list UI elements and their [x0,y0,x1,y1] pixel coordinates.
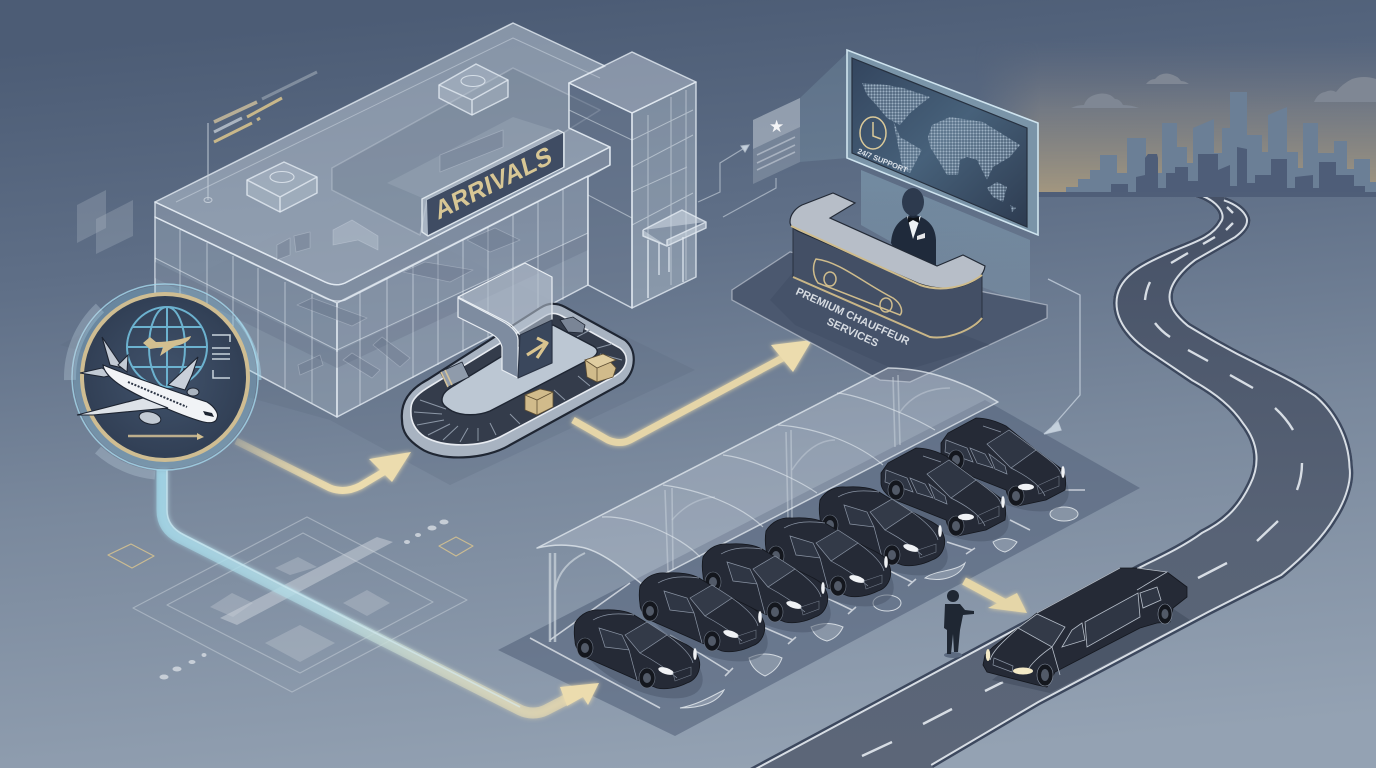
clock [860,117,886,149]
clouds [1071,74,1376,108]
parking bay lines [530,490,1085,708]
rooftop unit right [439,64,508,115]
data brackets [212,335,230,378]
reception desk [790,193,985,350]
canopy band [155,147,610,301]
map continents [862,83,1020,212]
canopy glass roof [537,368,998,585]
large airliner [77,337,218,426]
desk label: PREMIUM CHAUFFEUR [794,286,911,348]
kiosk tunnel [458,263,552,378]
service card with star: ★ [769,117,784,136]
luggage box front [525,389,553,415]
small gold plane [143,336,191,356]
car 2 [630,561,780,679]
flow arrow: plane to carousel [236,441,411,490]
luggage grey rear [560,317,585,333]
roof [155,23,610,285]
luggage box right [585,354,616,382]
holographic projection [800,52,1030,305]
dotted specks [160,520,448,680]
arrivals sign [422,130,564,236]
car logo [814,259,902,315]
service card with star [753,98,800,184]
desk gold trim [793,277,982,337]
skyline with dusk glow [996,66,1376,197]
decorative translucent panels [77,190,133,254]
floor plate: parking lot [498,400,1140,736]
arrival badge [70,284,260,475]
conveyor carousel [402,263,634,457]
entrance porch [643,210,706,298]
inner island [442,325,597,415]
floor plate: terminal [60,200,695,485]
canopy ribs [602,393,935,557]
flow line: plane to fleet [162,470,599,713]
desk front [793,228,982,337]
luggage grey [440,362,469,387]
connector: to service card [698,145,776,217]
flow arrow: carousel to desk [573,340,812,443]
arrivals sign: ARRIVALS [432,141,555,226]
centre dashes [862,207,1302,756]
car 5 [810,475,960,593]
direction arrow [128,435,197,437]
interior dark band [155,233,588,368]
tan markers [108,537,473,568]
belt slats [414,330,622,442]
road [750,197,1353,768]
horizon strip [1038,192,1376,197]
far SUV under canopy [931,411,1081,529]
rooftop unit left [247,162,317,212]
roof inner line [176,38,600,202]
glass canopy [537,368,998,642]
car 3 [693,532,843,650]
parking emblems [680,507,1078,708]
chauffeur figure [944,590,974,658]
city buildings light [1066,92,1376,192]
building right wall [337,176,588,417]
city buildings dark [1111,147,1365,192]
car 6 [871,441,1021,559]
limousine [983,568,1190,693]
parked fleet [565,441,1021,716]
glow arcs [70,284,260,475]
upper level [332,68,600,235]
canopy posts [550,375,950,642]
tower [569,52,696,308]
interior furniture [277,130,520,378]
car 4 [756,506,906,624]
belt [411,314,626,445]
world map display: 24/7 SUPPORT [856,147,909,175]
concierge [891,188,936,266]
floor diagram lower left [108,517,473,692]
carousel base [402,304,634,457]
world map display [847,50,1038,235]
desk top [790,193,985,288]
flow arrow: fleet to limousine [964,581,1027,613]
window mullions [155,188,588,405]
roof lighter deck [387,117,563,200]
reception platform [732,252,1047,382]
globe [127,307,207,387]
pole flag with data bars [204,72,317,202]
road edge stripes [750,197,1353,768]
badge disc [82,294,248,460]
connector: desk to fleet [1044,279,1080,434]
building left wall [155,217,337,417]
terminal building [155,23,706,417]
car 1 [565,598,715,716]
reception desk: SERVICES [825,316,880,350]
floor tiles [210,537,393,662]
